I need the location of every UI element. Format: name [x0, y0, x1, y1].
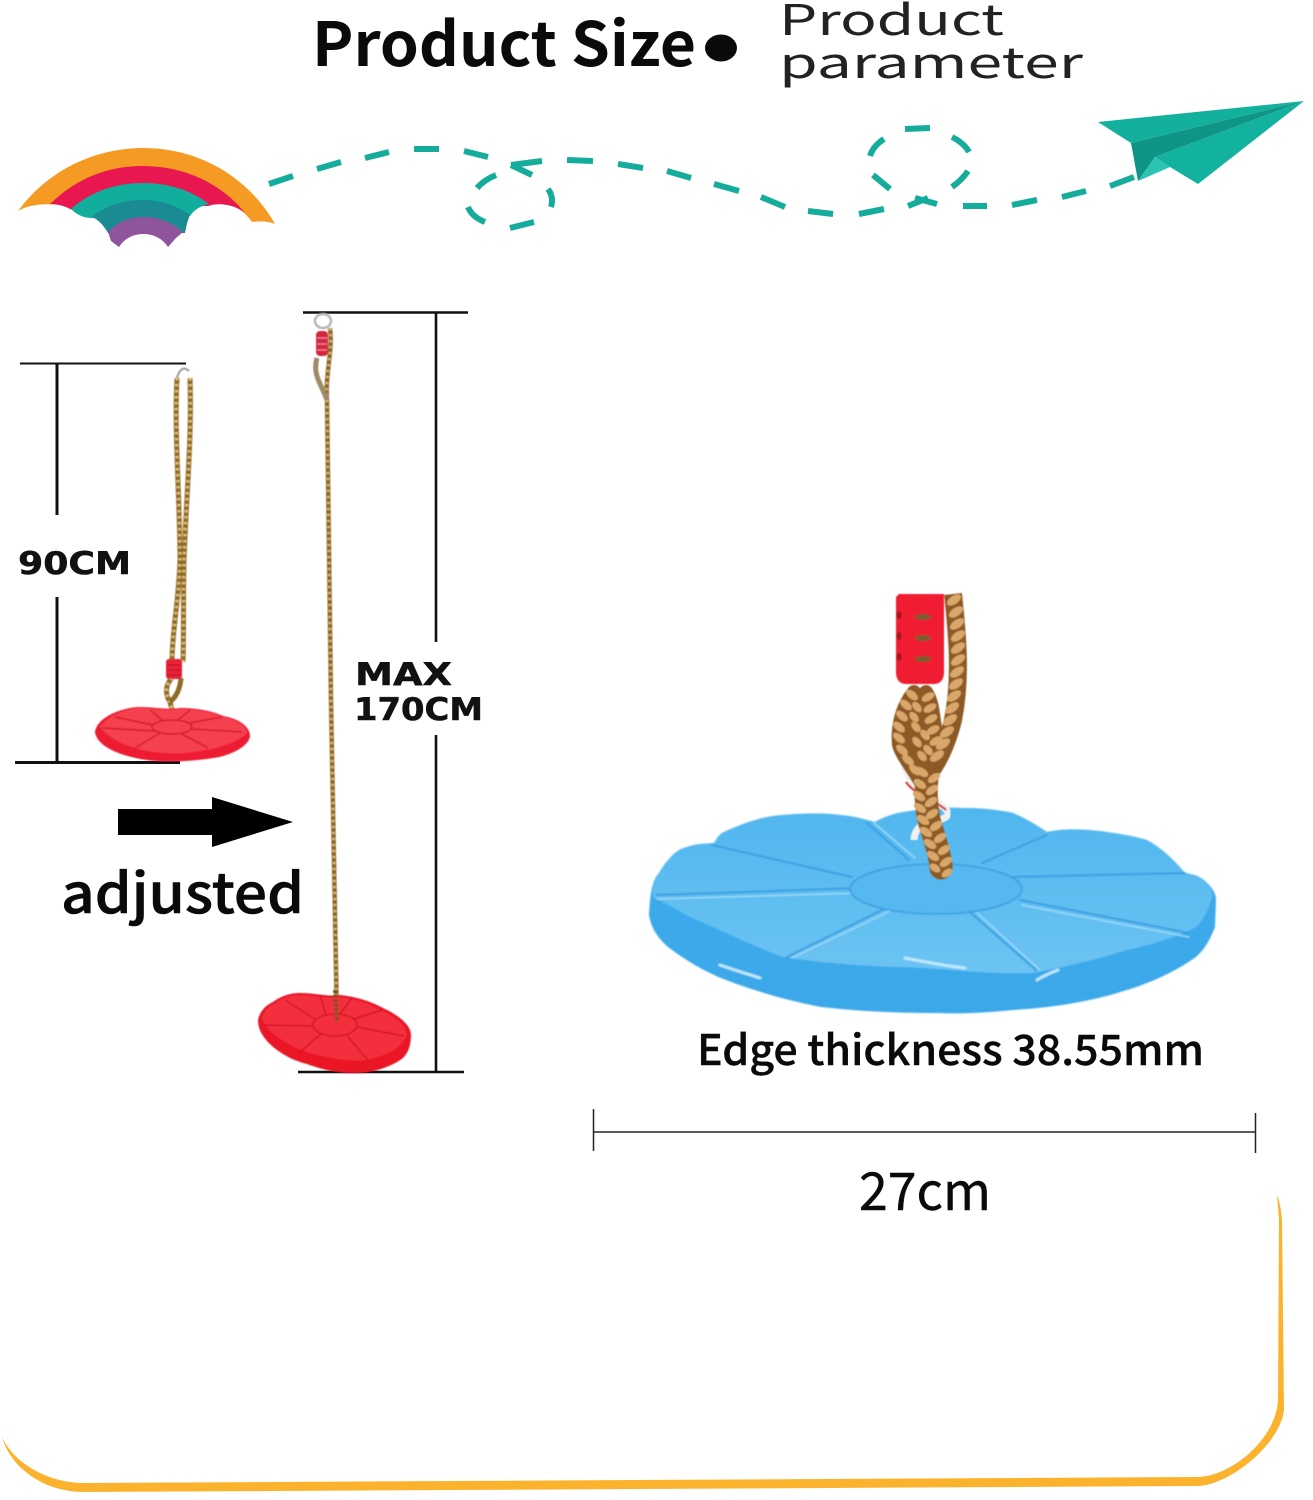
title bullet dot: [705, 34, 737, 62]
short swing with red disc: [95, 369, 250, 761]
hook ring: [177, 369, 189, 378]
red rope clip: [896, 594, 944, 684]
label: max 170cm: MAX: [355, 657, 452, 693]
label: edge thickness: Edge thickness 38.55mm: [697, 1017, 1204, 1078]
disc petal grooves and highlights: [657, 823, 1189, 980]
blue swing seat with rope: [649, 592, 1216, 1013]
icon: rainbow: [18, 148, 275, 247]
large red disc: [258, 990, 411, 1073]
icon: paper plane: [1098, 101, 1304, 184]
short rope: [166, 378, 190, 722]
disc top surface: [653, 808, 1212, 973]
braided rope: [891, 592, 967, 879]
label: 27cm: 27cm: [859, 1150, 991, 1225]
label: max 170cm: 170CM: [354, 692, 483, 728]
long swing with red disc: [258, 314, 411, 1073]
subtitle: product parameter: parameter: [779, 30, 1084, 91]
label: 90cm: 90CM: [18, 546, 131, 582]
dimension lines: 170cm: [298, 312, 468, 1072]
disc rim: [649, 808, 1216, 1013]
subtitle: product parameter: [779, 0, 1084, 91]
label: adjusted: adjusted: [61, 849, 304, 929]
blue disc: [649, 808, 1216, 1013]
red rope clip: [316, 331, 328, 356]
dimension lines: 90cm: [15, 363, 186, 762]
label: max 170cm: [354, 657, 483, 728]
disc hub: [850, 864, 1022, 914]
red rope clip: [166, 659, 182, 679]
wire twist: [904, 762, 948, 840]
dimension line: width: [594, 1109, 1256, 1153]
panel: yellow rounded card edge: [2, 1195, 1284, 1492]
dashed flight path: [269, 128, 1134, 228]
hook ring: [315, 314, 331, 328]
long rope: [316, 328, 337, 1022]
arrow: adjusted: [118, 797, 293, 847]
small red disc: [95, 707, 250, 761]
